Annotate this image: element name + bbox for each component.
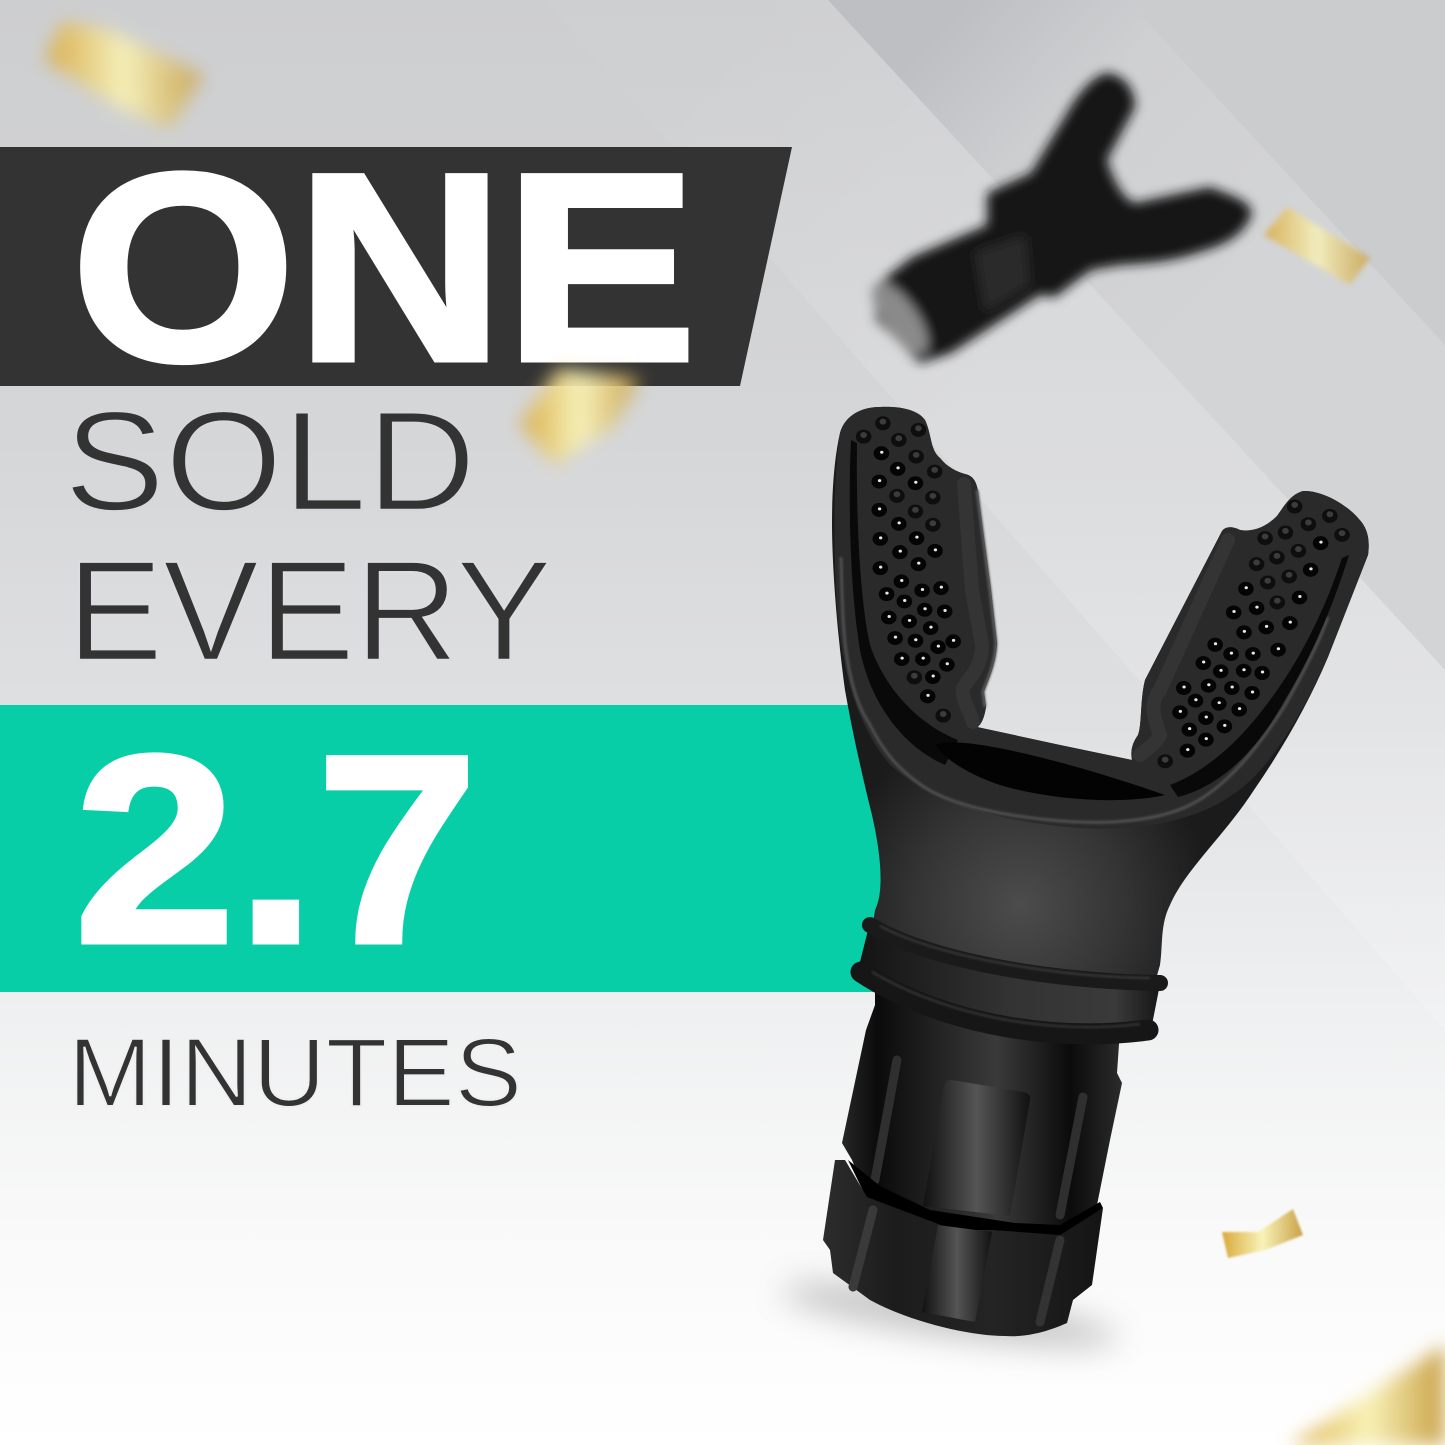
base cap: [823, 1160, 1103, 1336]
text: MINUTES: MINUTES: [68, 1018, 522, 1127]
ring two highlight: [872, 972, 1140, 1027]
dark channel left: [850, 440, 958, 765]
dark channel right: [1170, 555, 1349, 797]
ring two: [861, 972, 1148, 1034]
side rib right: [1060, 1097, 1083, 1215]
right inner ridge: [1140, 540, 1228, 755]
gap between body and cap: [848, 1160, 1103, 1237]
blurred product in background: [862, 73, 1252, 363]
text: SOLD: SOLD: [64, 382, 476, 541]
number: 2.7: 2.7: [74, 699, 478, 999]
side rib left: [875, 1060, 897, 1180]
bite pad dots: [856, 416, 1350, 768]
cap lug centre: [922, 1225, 992, 1322]
gold confetti lower right: [1222, 1209, 1303, 1258]
rim highlight: [841, 557, 1328, 822]
ring one: [870, 925, 1160, 983]
gold confetti right: [1264, 207, 1370, 285]
heading: ONE: ONE: [71, 117, 697, 417]
mouthpiece body: [832, 407, 1369, 1000]
lower body: [842, 985, 1122, 1237]
air hole: [936, 742, 1165, 800]
left side wall: [977, 490, 996, 707]
gold confetti corner: [1290, 1345, 1445, 1445]
gold confetti top left: [45, 22, 203, 128]
text: EVERY: EVERY: [67, 532, 552, 691]
left inner ridge: [963, 484, 982, 722]
cap rib right: [1040, 1240, 1060, 1322]
central lug: [923, 1080, 1030, 1216]
mouthpiece inner face: [834, 407, 1369, 829]
product: breathing trainer mouthpiece: [823, 407, 1369, 1336]
neck band between rings: [858, 930, 1160, 1037]
floor shadow: [779, 1270, 1121, 1360]
ring one highlight: [880, 926, 1150, 978]
gold confetti centre: [520, 368, 640, 465]
black banner: [0, 147, 792, 386]
teal banner: [0, 705, 900, 992]
cap rib left: [853, 1210, 873, 1287]
